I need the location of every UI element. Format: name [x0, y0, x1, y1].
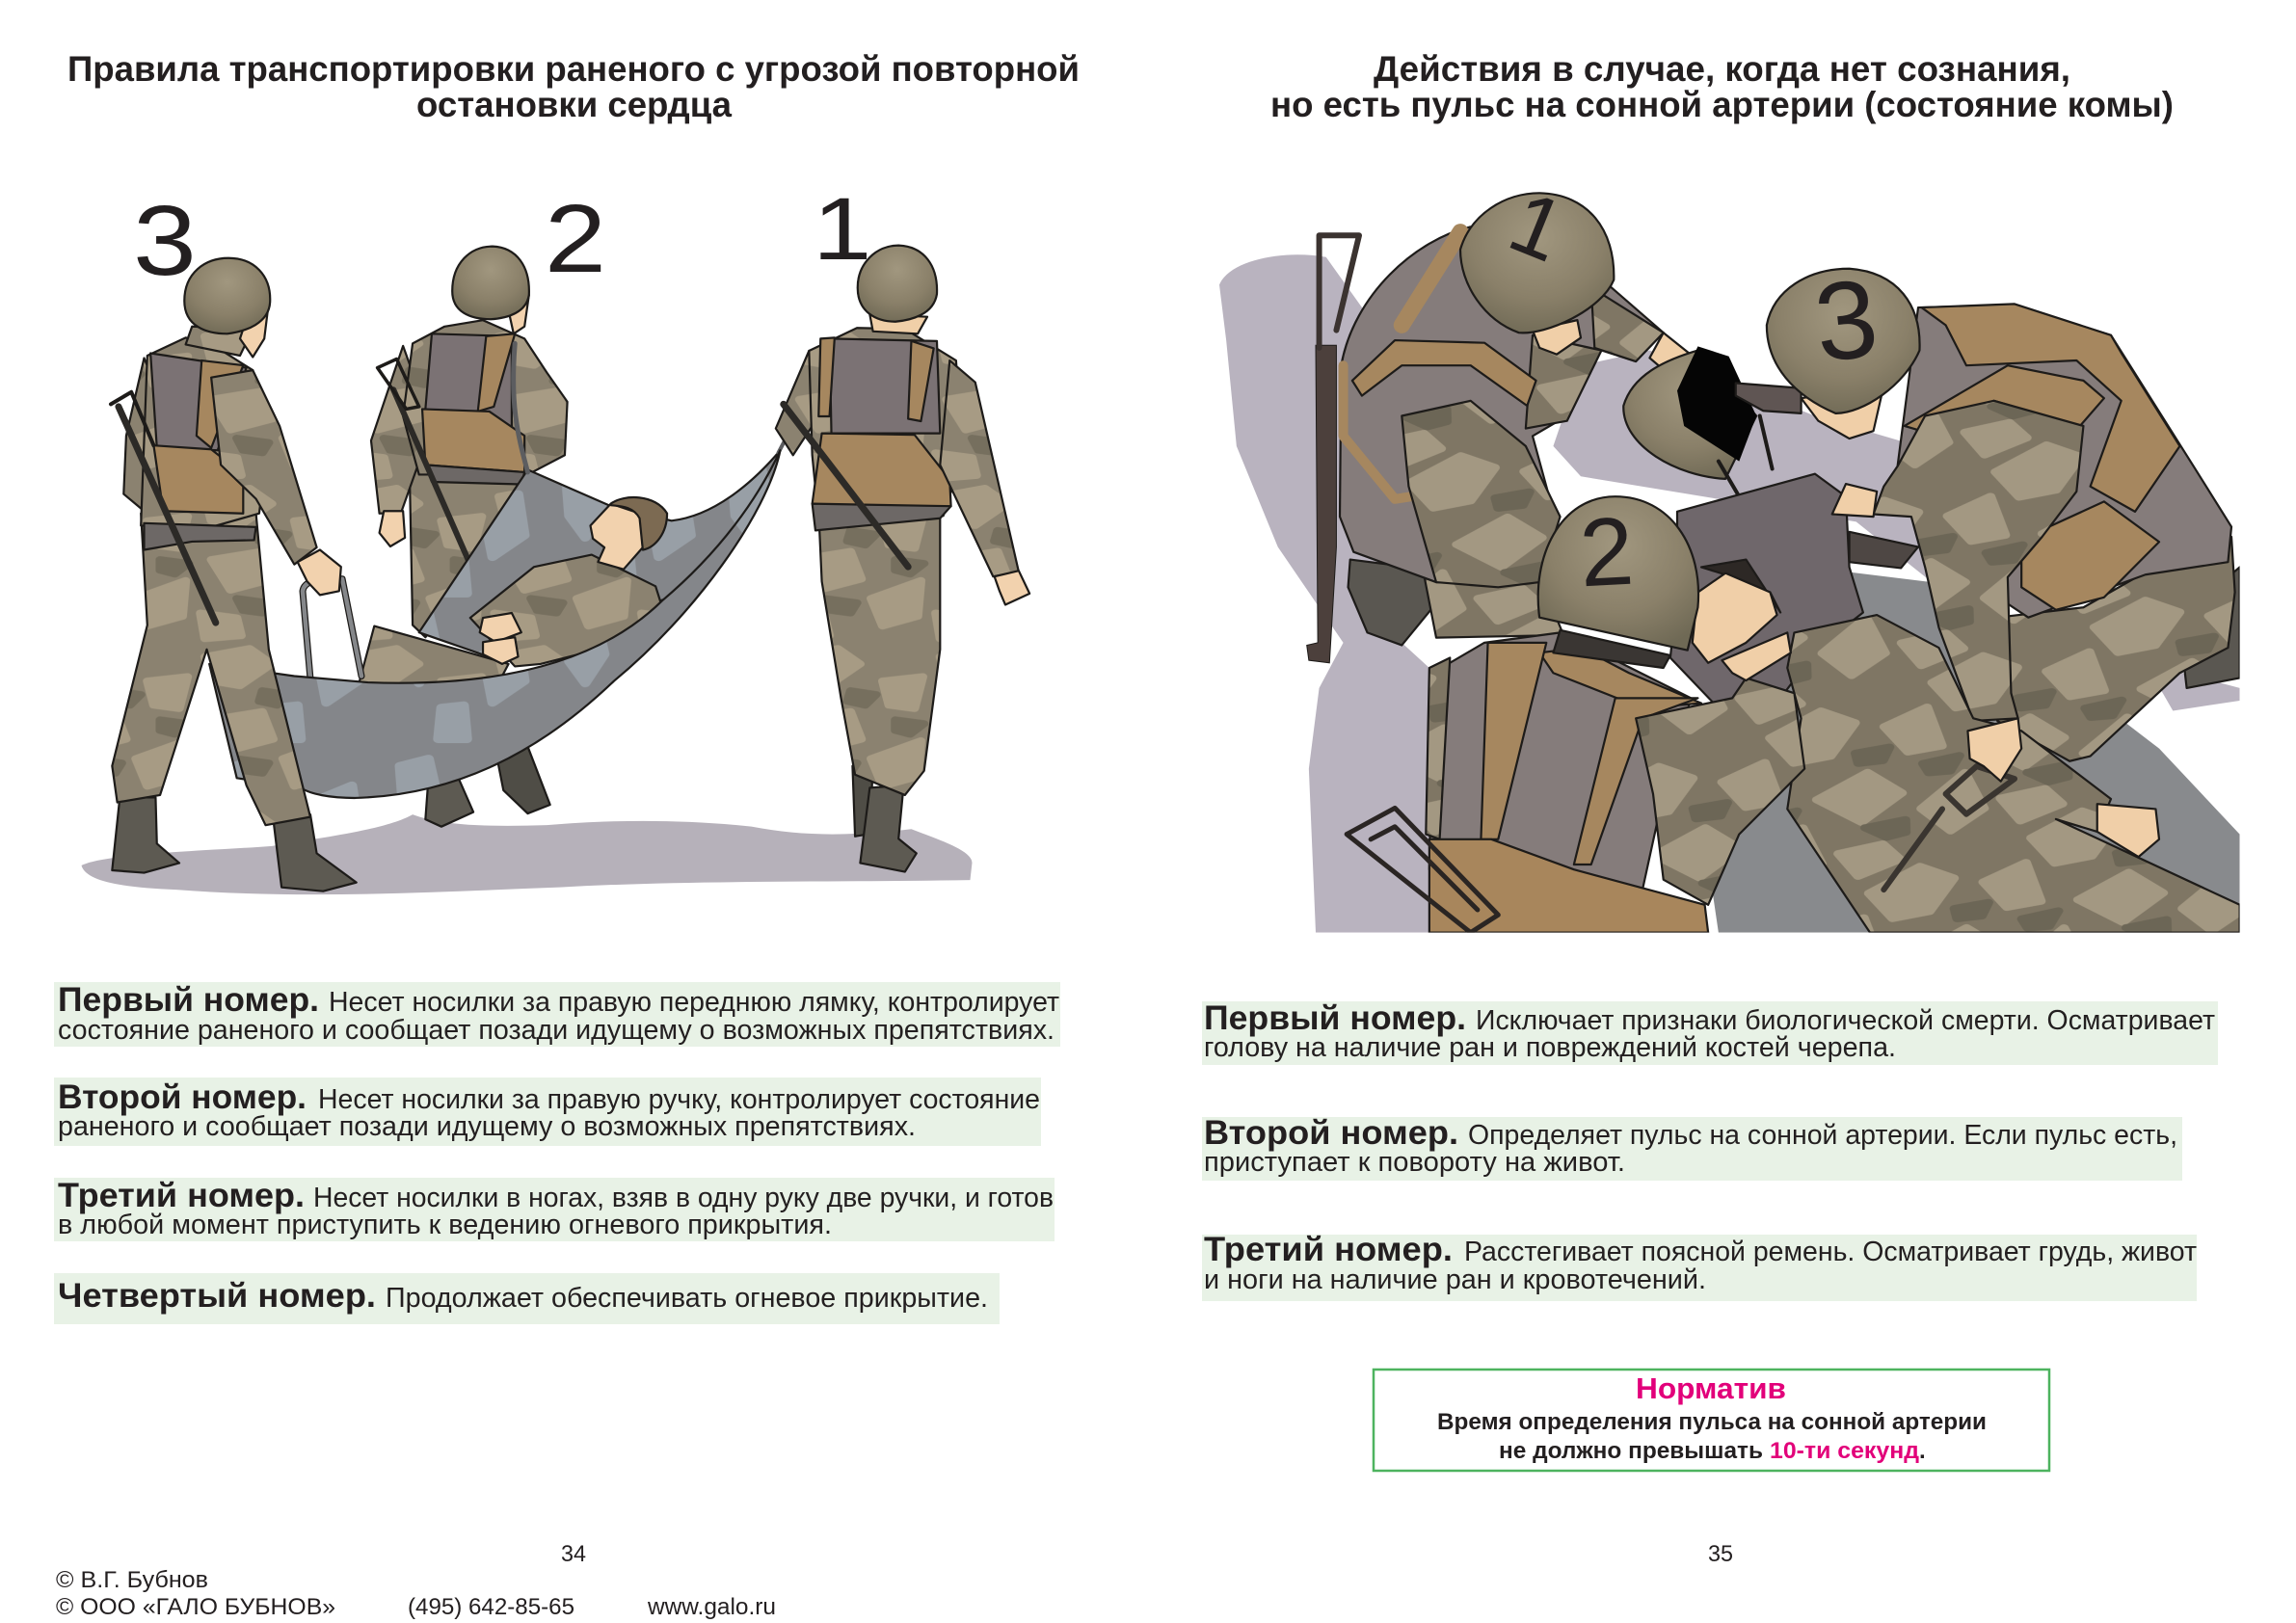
panel: first carrier, left: Несет носилки за правую переднюю лямку, контролирует [329, 987, 1059, 1018]
panel: third carrier, left: Третий номер. [58, 1177, 305, 1214]
callout: standard time: Время определения пульса на сонной артерии [1437, 1409, 1987, 1435]
title: left page: остановки сердца [416, 85, 732, 124]
panel: third carrier, left [54, 1177, 1055, 1241]
panel: second soldier, right [1202, 1114, 2182, 1181]
stretcher [1705, 572, 2240, 933]
number on helmet 1: 1 [1497, 173, 1578, 281]
stretcher: carrying handle [303, 578, 361, 678]
illustration: three soldiers carrying a wounded man on a stretcher [81, 246, 1029, 894]
title: left page [67, 49, 1080, 124]
panel: second soldier, right: приступает к повороту на живот. [1204, 1147, 1625, 1178]
panel: fourth carrier, left [54, 1273, 1000, 1324]
panel: third soldier, right: Третий номер. [1204, 1231, 1453, 1268]
page number 34: 34 [561, 1541, 586, 1567]
number 3: 3 [133, 185, 197, 296]
panel: first soldier, right: Исключает признаки биологической смерти. Осматривает [1476, 1005, 2215, 1036]
panel: second soldier, right: Определяет пульс на сонной артерии. Если пульс есть, [1468, 1120, 2177, 1151]
panel: third carrier, left: в любой момент приступить к ведению огневого прикрытия. [58, 1210, 832, 1240]
panel: first carrier, left [54, 981, 1060, 1047]
panel: third soldier, right [1202, 1231, 2197, 1301]
number on helmet 2: 2 [1577, 497, 1636, 607]
panel: first soldier, right: Первый номер. [1204, 999, 1466, 1037]
footer: copyright and contacts: www.galo.ru [647, 1594, 776, 1620]
rifle [1307, 235, 1359, 663]
soldier 1 [776, 246, 1029, 872]
helmet in hand [1623, 346, 1773, 496]
number on helmet 3: 3 [1809, 256, 1883, 386]
panel: second carrier, left: раненого и сообщает позади идущему о возможных препятствиях. [58, 1111, 916, 1142]
callout: standard time: . [1919, 1438, 1926, 1464]
panel: first carrier, left: Первый номер. [58, 981, 319, 1019]
number 2: 2 [545, 184, 606, 292]
footer: copyright and contacts: © ООО «ГАЛО БУБНОВ» [56, 1594, 335, 1620]
soldier 2 [1347, 496, 1804, 933]
title: right page: но есть пульс на сонной артерии (состояние комы) [1270, 85, 2174, 124]
title: left page: Правила транспортировки раненого с угрозой повторной [67, 49, 1080, 89]
panel: third soldier, right: Расстегивает поясной ремень. Осматривает грудь, живот [1464, 1237, 2197, 1267]
wounded man [359, 497, 667, 688]
panel: second carrier, left: Второй номер. [58, 1078, 307, 1116]
panel: first soldier, right [1202, 999, 2218, 1065]
rifle of soldier 3 [1736, 384, 1802, 413]
illustration: three soldiers examining an unconscious man [1219, 193, 2240, 933]
ground shadow [81, 814, 972, 894]
title: right page: Действия в случае, когда нет сознания, [1374, 49, 2070, 89]
stretcher: front sheet [209, 450, 780, 798]
panel: third soldier, right: и ноги на наличие ран и кровотечений. [1204, 1264, 1706, 1295]
panel: second soldier, right: Второй номер. [1204, 1114, 1458, 1152]
cloth under the head [1670, 474, 1863, 708]
hand of soldier 3 on the belt [1967, 718, 2021, 782]
magazine [1850, 532, 1918, 568]
stretcher: back sheet [419, 450, 780, 659]
callout: standard time: Норматив [1636, 1371, 1786, 1405]
panel: second carrier, left [54, 1078, 1041, 1146]
number 1: 1 [813, 179, 871, 279]
panel: fourth carrier, left: Четвертый номер. [58, 1277, 376, 1315]
panel: first soldier, right: голову на наличие ран и повреждений костей черепа. [1204, 1032, 1896, 1063]
soldier 3 [111, 258, 357, 891]
callout: standard time: не должно превышать [1499, 1438, 1763, 1464]
wounded man [1693, 560, 2240, 933]
soldier 1 [1340, 193, 1701, 645]
panel: first carrier, left: состояние раненого и сообщает позади идущему о возможных препятствиях. [58, 1015, 1055, 1046]
title: right page [1270, 49, 2174, 124]
panel: fourth carrier, left: Продолжает обеспечивать огневое прикрытие. [386, 1283, 988, 1314]
callout: standard time: 10-ти секунд [1770, 1438, 1919, 1464]
page number 35: 35 [1708, 1541, 1733, 1567]
soldier 2 [371, 247, 568, 827]
cast shadows [1219, 254, 2240, 933]
soldier 3 [1767, 269, 2240, 761]
panel: third carrier, left: Несет носилки в ногах, взяв в одну руку две ручки, и готов [313, 1183, 1054, 1213]
panel: second carrier, left: Несет носилки за правую ручку, контролирует состояние [318, 1084, 1040, 1115]
footer: copyright and contacts: © В.Г. Бубнов [56, 1567, 208, 1593]
footer: copyright and contacts: (495) 642-85-65 [408, 1594, 574, 1620]
stretcher: straps [514, 343, 797, 472]
callout: standard time [1374, 1370, 2049, 1471]
footer: copyright and contacts [56, 1567, 776, 1620]
